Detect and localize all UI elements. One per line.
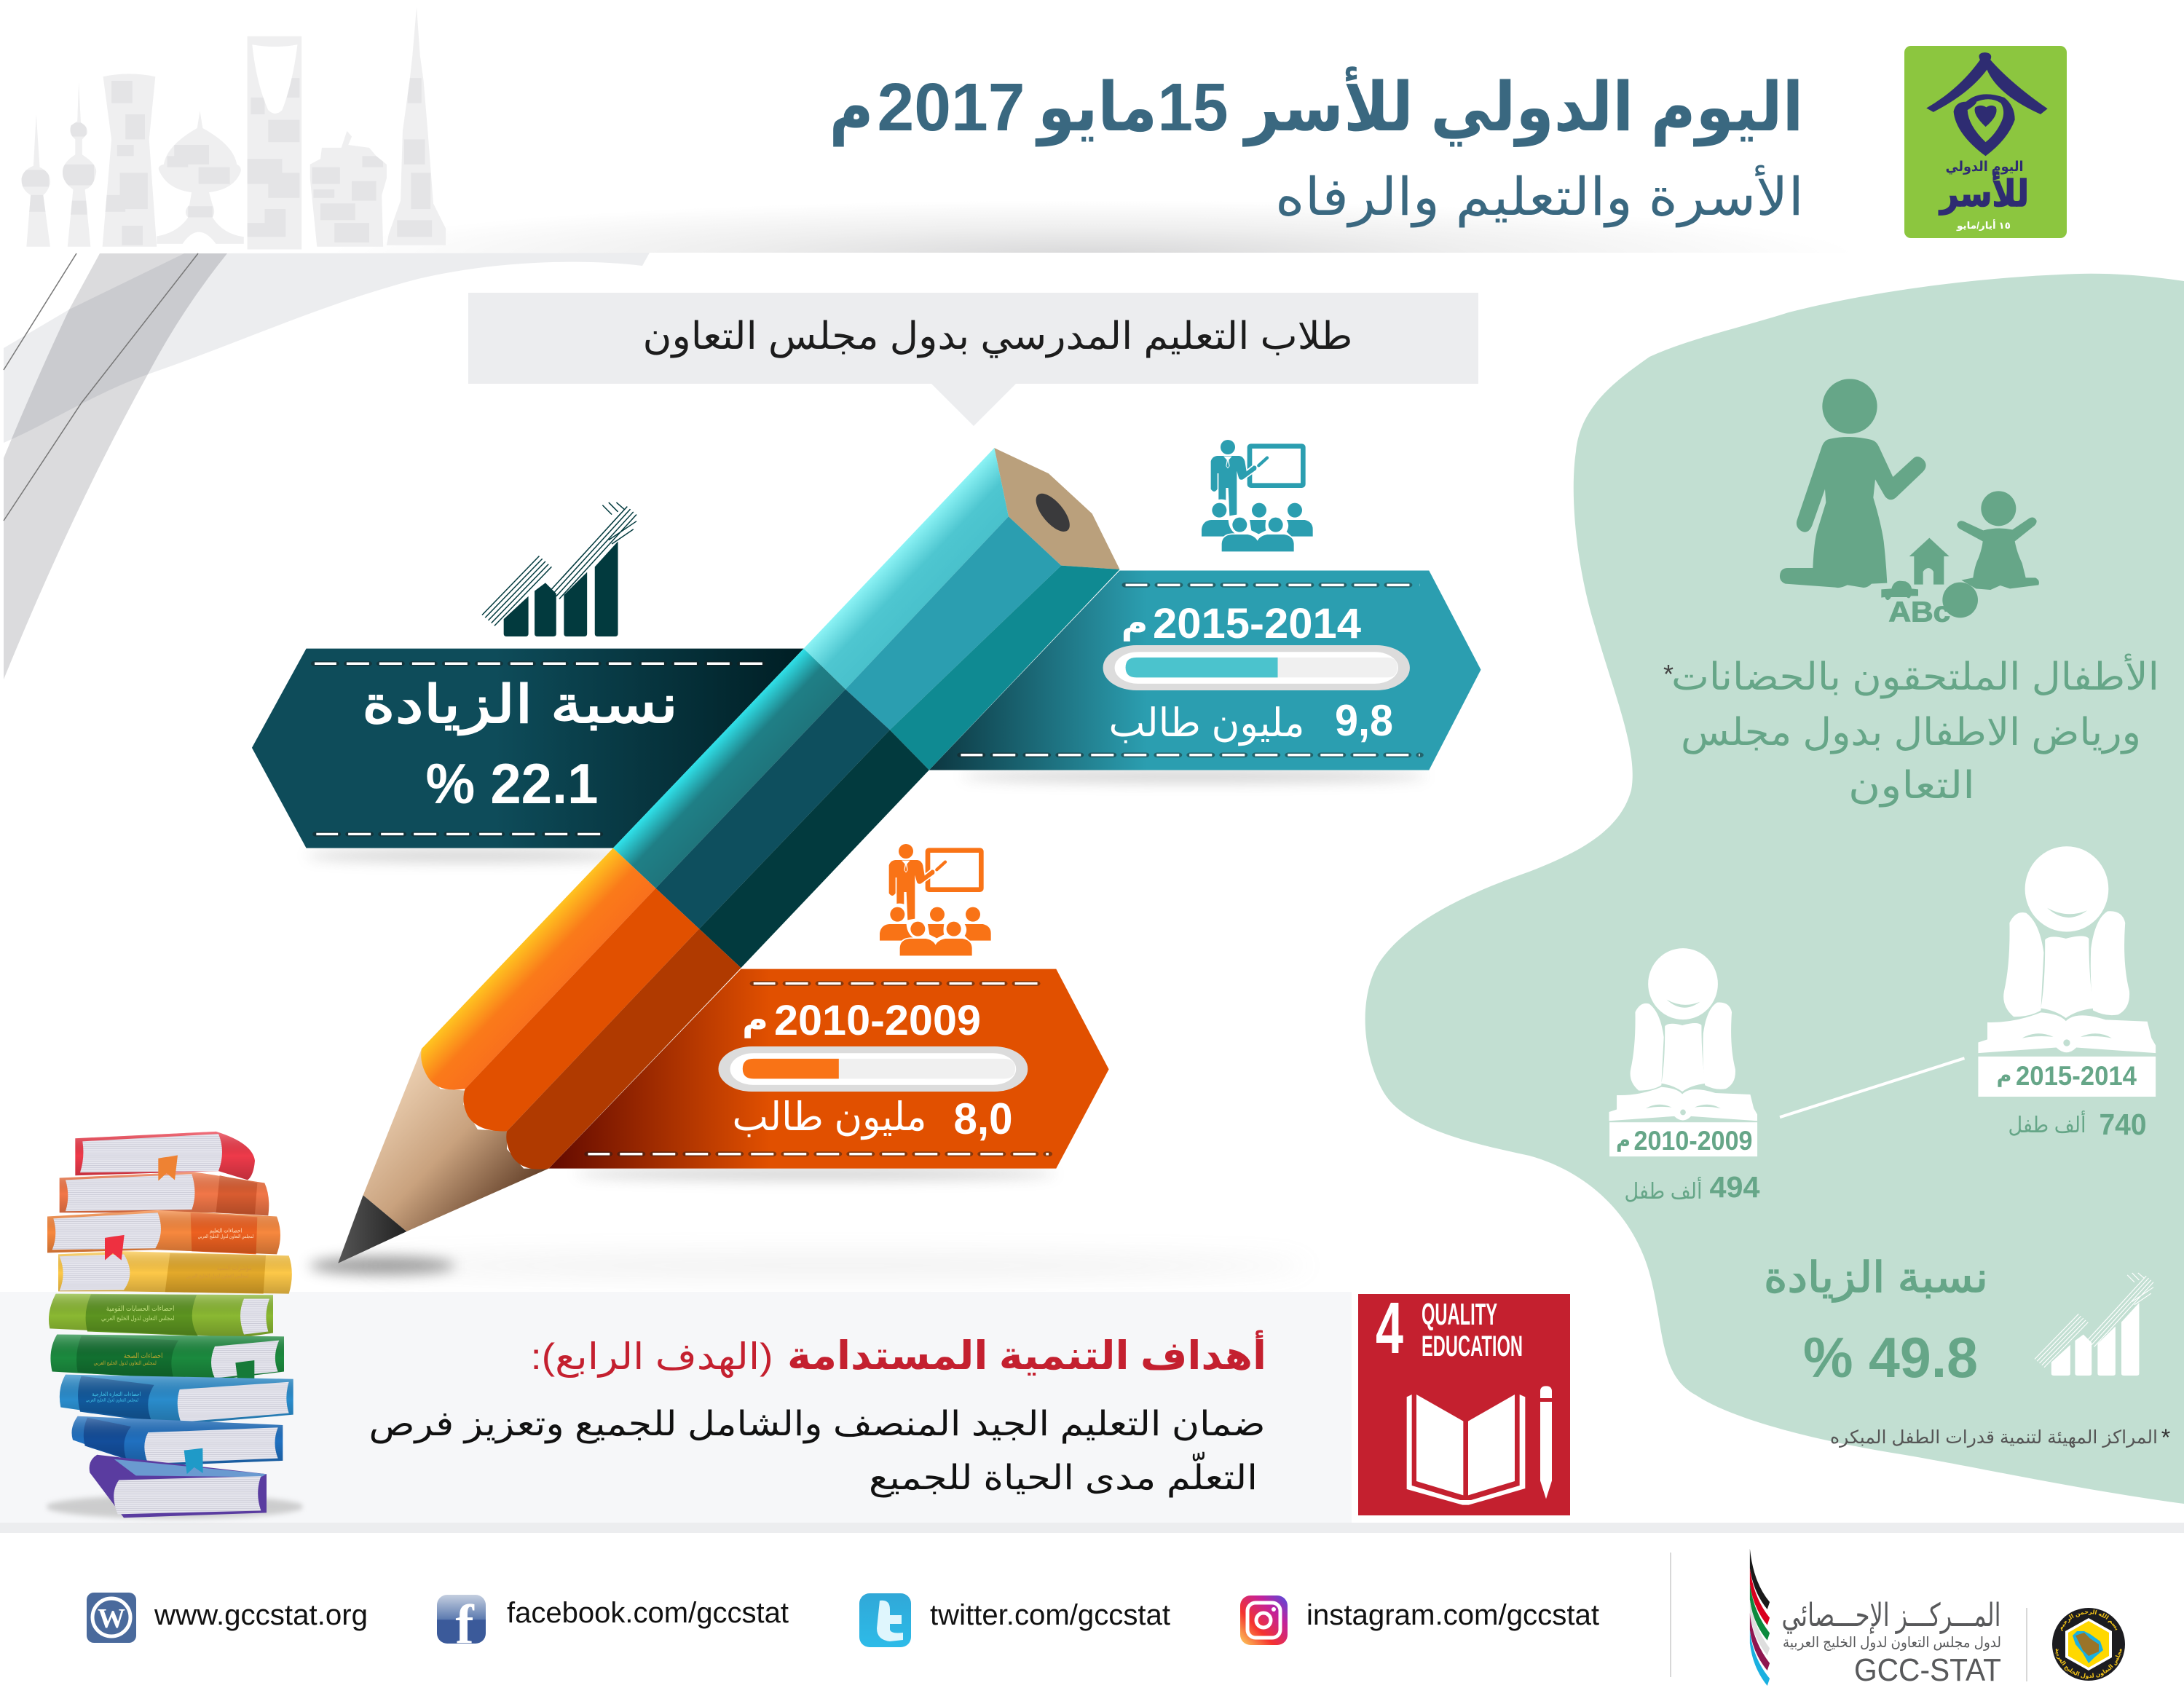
footer: instagram	[1240, 1595, 1599, 1645]
nurseries heading text: *	[1663, 659, 1674, 689]
ribbon text 2009-2010: م	[742, 1002, 768, 1038]
book dark green: لمجلس التعاون لدول الخليج العربي	[94, 1361, 157, 1366]
pencil teal section	[804, 448, 1120, 770]
footnote: المراكز المهيئة لتنمية قدرات الطفل المبكره	[1830, 1427, 2158, 1448]
book orange 1	[60, 1172, 269, 1215]
SDG body text: التعلّم مدى الحياة للجميع	[869, 1452, 1258, 1498]
ribbon text 2014-2015	[1108, 600, 1393, 746]
stats: 2014-2015 children: 2015-2014	[2016, 1061, 2137, 1091]
icon: instagram	[1240, 1595, 1288, 1645]
ribbon text 2014-2015: م	[1121, 605, 1148, 642]
stack of books	[46, 1132, 304, 1518]
title: مايو	[1035, 69, 1157, 147]
stats: 2009-2010 children: م	[1616, 1129, 1631, 1152]
stats: nursery increase rate: نسبة الزيادة	[1764, 1254, 1988, 1303]
pencil	[338, 448, 1120, 1263]
footnote: *	[2161, 1424, 2170, 1451]
book orange 2: لمجلس التعاون لدول الخليج العربي	[198, 1234, 254, 1239]
footer: facebook	[437, 1594, 789, 1655]
title: م	[829, 69, 874, 147]
ribbon text 2014-2015: 2015-2014	[1153, 600, 1361, 647]
logo text	[1938, 159, 2029, 231]
icon: teacher orange	[880, 844, 991, 955]
book purple	[90, 1455, 267, 1518]
SDG heading: (الهدف الرابع):	[530, 1336, 773, 1378]
SDG body text: ضمان التعليم الجيد المنصف والشامل للجميع وتعزيز فرص	[368, 1404, 1266, 1444]
progress bar 2009-2010	[719, 1046, 1028, 1092]
logo text: المـــركـــز الإحـــصائي	[1781, 1598, 2001, 1634]
icon: facebook	[437, 1594, 486, 1655]
stats: 2009-2010 children	[1616, 1126, 1760, 1204]
book blue: احصاءات التجارة الخارجية	[92, 1392, 141, 1397]
SDG 4 badge: 4	[1376, 1287, 1403, 1369]
logo coloured ribbons	[1750, 1549, 1770, 1686]
ribbon text 2014-2015: مليون طالب	[1108, 701, 1305, 746]
logo text: ١٥ أيار/مايو	[1956, 219, 2011, 231]
trend line	[1780, 1058, 1964, 1117]
icon: wordpress: W	[98, 1604, 125, 1634]
book dark green: احصاءات الصحة	[124, 1352, 162, 1360]
nurseries heading text: ورياض الاطفال بدول مجلس	[1681, 711, 2141, 754]
footer: website: www.gccstat.org	[154, 1599, 368, 1631]
SDG 4 badge	[1358, 1287, 1570, 1515]
SDG body text	[368, 1404, 1266, 1498]
icon: growth chart white	[2035, 1273, 2153, 1376]
logo text	[1781, 1598, 2001, 1688]
ribbon text increase rate: % 22.1	[425, 752, 599, 816]
stats: nursery increase rate: % 49.8	[1803, 1325, 1978, 1389]
book yellow: لمجلس التعاون لدول الخليج العربي	[186, 1274, 248, 1279]
book blue: لمجلس التعاون لدول الخليج العربي	[86, 1398, 138, 1403]
icon: facebook: f	[455, 1594, 475, 1655]
book orange 2	[47, 1210, 280, 1254]
pencil wood tip	[363, 1049, 548, 1231]
book blue	[60, 1375, 293, 1424]
stats: 2009-2010 children: 494	[1710, 1170, 1760, 1204]
footer: website	[87, 1593, 368, 1643]
icons: reading children and trend line	[1609, 846, 2156, 1156]
logo text: اليوم الدولي	[1946, 159, 2023, 175]
pencil lead	[338, 1195, 406, 1263]
logo: International Day of Families	[1904, 46, 2067, 238]
stats: 2014-2015 children: م	[1997, 1064, 2011, 1087]
year box small	[1609, 1122, 1757, 1156]
stats: 2009-2010 children: 2010-2009	[1634, 1126, 1752, 1156]
book yellow: مؤشرات التنمية	[217, 1264, 252, 1271]
GCC emblem	[2052, 1608, 2125, 1681]
ribbon shadows	[306, 770, 1427, 1275]
GCC-Stat logo	[1750, 1549, 2001, 1688]
stats: 2014-2015 children: ألف طفل	[2008, 1110, 2086, 1137]
ribbon text increase rate	[362, 676, 678, 816]
divider lines footer	[1671, 1553, 2027, 1681]
footer: facebook: facebook.com/gccstat	[507, 1597, 789, 1629]
nurseries heading text	[1663, 653, 2159, 808]
icon: growth chart dark	[482, 502, 636, 636]
book red	[75, 1132, 255, 1180]
title: اليوم الدولي للأسر	[1242, 66, 1803, 147]
SDG 4 badge: QUALITY	[1422, 1297, 1497, 1331]
nurseries heading text: الأطفال الملتحقون بالحضانات	[1671, 653, 2159, 699]
GCC emblem: مجلس التعاون لدول الخليج العربية	[2055, 1649, 2122, 1679]
book green: لمجلس التعاون لدول الخليج العربي	[101, 1314, 175, 1322]
title: 15	[1158, 69, 1228, 145]
book orange 2: احصاءات التعليم	[210, 1227, 242, 1234]
callout box: school students heading: طلاب التعليم المدرسي بدول مجلس التعاون	[642, 315, 1353, 358]
stats: 2009-2010 children: ألف طفل	[1624, 1176, 1703, 1204]
SDG heading: أهداف التنمية المستدامة	[787, 1330, 1266, 1378]
footer: twitter: twitter.com/gccstat	[930, 1599, 1170, 1631]
bookmarks	[105, 1155, 203, 1474]
decorative grey swoosh	[4, 253, 650, 679]
ribbon text increase rate: نسبة الزيادة	[362, 676, 678, 735]
book yellow	[58, 1251, 292, 1294]
books ground shadow	[46, 1495, 304, 1518]
footer: twitter	[859, 1593, 1170, 1647]
ribbon shapes	[252, 570, 1481, 1169]
reader big	[1978, 846, 2156, 1053]
nurseries heading text: التعاون	[1848, 765, 1975, 808]
pencil orange section	[421, 848, 741, 1169]
reader small	[1609, 948, 1757, 1121]
logo house and heart mark	[1926, 52, 2048, 156]
stats: nursery increase rate	[1764, 1254, 1988, 1389]
book blue 2	[71, 1416, 283, 1466]
skyline of Gulf landmarks	[22, 9, 446, 249]
stats: 2014-2015 children: 740	[2099, 1108, 2147, 1141]
green blob panel	[1365, 274, 2184, 1504]
subtitle: الأسرة والتعليم والرفاه	[1275, 165, 1804, 228]
ribbon text 2009-2010	[733, 997, 1012, 1143]
SDG 4 badge: EDUCATION	[1422, 1330, 1523, 1362]
stats: 2014-2015 children	[1997, 1061, 2147, 1141]
icon: twitter	[859, 1593, 911, 1647]
icon: mother and child with toys	[1780, 379, 2039, 628]
SDG band background	[0, 1292, 2184, 1533]
progress bar 2014-2015	[1103, 645, 1410, 690]
pencil dark section	[613, 649, 929, 968]
ribbon text 2014-2015: 9,8	[1335, 696, 1393, 745]
ribbon text 2009-2010: 2010-2009	[774, 997, 981, 1044]
icon: teacher teal	[1202, 440, 1313, 551]
header gradient band	[0, 197, 1893, 253]
book dark green	[50, 1335, 284, 1387]
pencil top eraser end	[994, 448, 1120, 569]
badge icon: open book and pencil	[1407, 1386, 1552, 1505]
icon: mother and child with toys: ABc	[1888, 596, 1950, 628]
callout box: school students heading	[468, 293, 1478, 426]
SDG heading	[530, 1330, 1266, 1378]
ribbon text 2009-2010: مليون طالب	[733, 1095, 926, 1140]
footer: instagram: instagram.com/gccstat	[1306, 1599, 1599, 1631]
logo text: GCC-STAT	[1854, 1652, 2001, 1688]
book green: احصاءات الحسابات القومية	[106, 1304, 174, 1312]
logo text: لدول مجلس التعاون لدول الخليج العربية	[1783, 1635, 2001, 1651]
year box big	[1978, 1057, 2156, 1097]
icon: wordpress	[87, 1593, 136, 1643]
GCC emblem: بسم الله الرحمن الرحيم	[2061, 1609, 2118, 1631]
title	[829, 66, 1803, 147]
title: 2017	[877, 69, 1025, 145]
book green	[49, 1294, 273, 1338]
logo text: للأسر	[1938, 171, 2029, 216]
ribbon text 2009-2010: 8,0	[954, 1094, 1012, 1143]
